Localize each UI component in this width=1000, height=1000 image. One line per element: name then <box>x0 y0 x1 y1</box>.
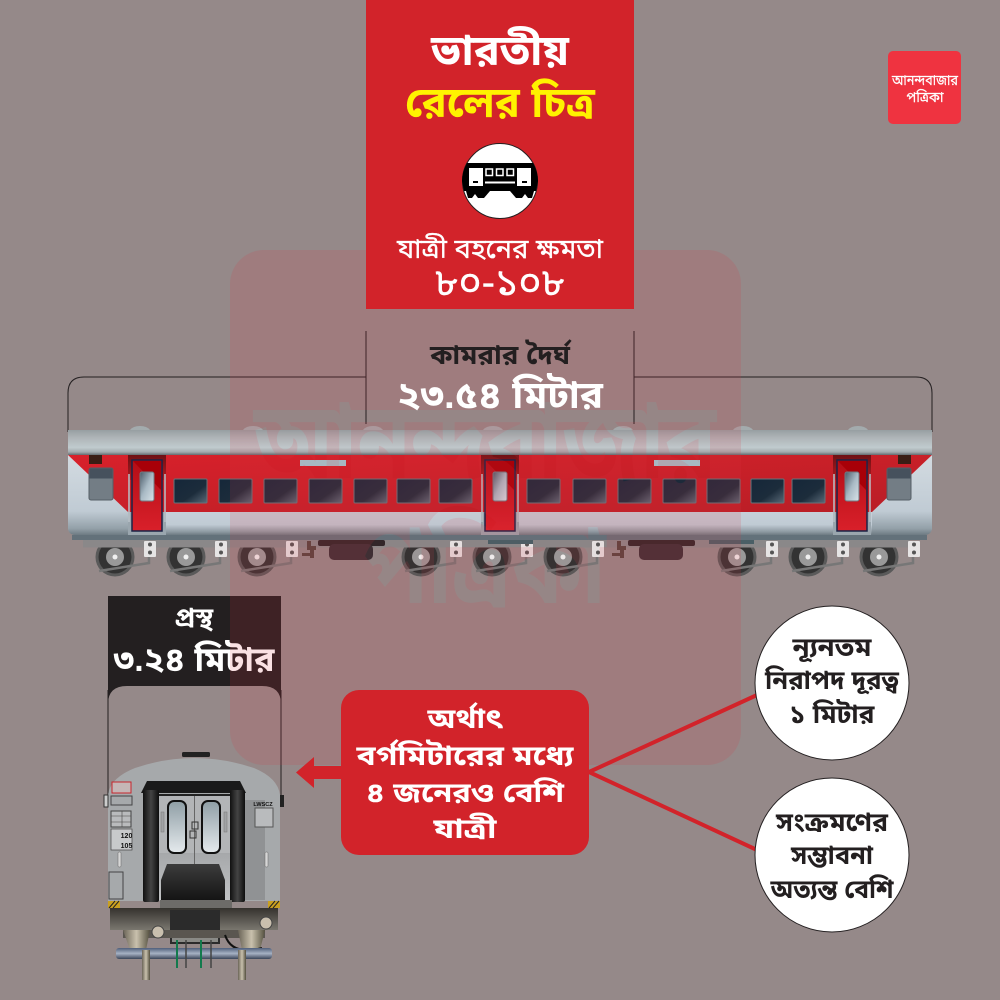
roof vents <box>130 426 868 430</box>
dimension bracket: coach length <box>68 331 932 432</box>
gangway platform <box>160 900 232 910</box>
generators <box>302 540 695 560</box>
coach length label: ২৩.৫৪ মিটার <box>397 373 604 417</box>
coach length label: কামরার দৈর্ঘ <box>429 339 572 370</box>
lower silver band <box>68 512 932 535</box>
door windows <box>168 801 186 853</box>
watermark panel with knocked-out masthead <box>230 250 741 765</box>
circle: infection risk: সংক্রমণের <box>775 807 888 837</box>
circle: infection risk: সম্ভাবনা <box>790 840 874 870</box>
doors <box>128 455 871 535</box>
passenger capacity label: যাত্রী বহনের ক্ষমতা <box>396 233 604 264</box>
arrow to coach <box>296 757 341 788</box>
logo <box>888 51 961 124</box>
warning sign and data plates <box>109 782 273 899</box>
callout: passengers per square metre: ৪ জনেরও বেশি <box>366 776 565 808</box>
wheel brackets <box>144 541 920 557</box>
callout: passengers per square metre: যাত্রী <box>432 812 498 844</box>
warning sign and data plates: 105 <box>121 843 132 850</box>
door pillars <box>143 790 159 902</box>
title: ভারতীয় <box>430 26 570 75</box>
logo: পত্রিকা <box>906 89 944 105</box>
coach end body <box>108 758 280 901</box>
passenger capacity value: ৮০-১০৮ <box>435 262 565 304</box>
hazard stripes <box>108 901 280 908</box>
end windows and vents <box>89 455 911 500</box>
rear view coach dimension bracket <box>108 690 281 797</box>
silver nose ends <box>68 455 128 535</box>
roof <box>68 430 932 455</box>
roof-side slots <box>300 460 700 466</box>
title panel: রেলের চিত্র <box>405 78 596 127</box>
warning sign and data plates: 120 <box>121 833 132 840</box>
circle: minimum safe distance: নিরাপদ দূরত্ব <box>764 664 899 695</box>
logo: আনন্দবাজার <box>891 72 959 88</box>
callout: passengers per square metre: বর্গমিটারের মধ্যে <box>355 738 575 771</box>
connector lines <box>589 695 757 850</box>
train side view <box>68 426 932 576</box>
title panel <box>366 0 634 309</box>
wheels <box>96 538 913 576</box>
rear view of coach <box>104 752 284 980</box>
roof cap <box>182 752 210 757</box>
circle: minimum safe distance: ন্যূনতম <box>791 632 872 664</box>
callout: passengers per square metre <box>341 690 589 855</box>
circle: infection risk: অত্যন্ত বেশি <box>770 873 894 904</box>
green strips <box>488 540 533 544</box>
circle: minimum safe distance <box>755 606 909 760</box>
coach width label panel: ৩.২৪ মিটার <box>114 639 275 679</box>
red body <box>68 455 932 513</box>
warning sign and data plates: LWSCZ <box>253 802 273 808</box>
hood <box>141 781 246 793</box>
coach length label <box>397 339 604 417</box>
icon: train <box>462 144 538 218</box>
door leaves <box>159 795 230 865</box>
side windows <box>174 479 825 503</box>
undercarriage <box>110 908 278 980</box>
underframe strips <box>83 540 910 548</box>
gangway step <box>161 864 225 900</box>
door shadow <box>244 800 265 900</box>
width label: প্রস্থ <box>175 602 214 632</box>
callout: passengers per square metre: অর্থাৎ <box>426 701 504 734</box>
circle: minimum safe distance: ১ মিটার <box>790 698 875 729</box>
circle: infection risk <box>755 778 909 932</box>
coach width label panel <box>108 596 281 704</box>
